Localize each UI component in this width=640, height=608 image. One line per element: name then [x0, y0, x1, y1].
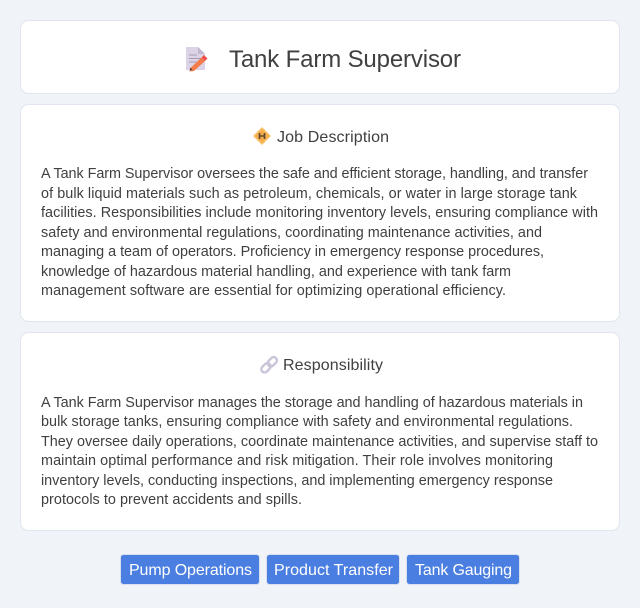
- tag: pump operations: [120, 554, 260, 584]
- text block: job description: knowledge of hazardous material handling, and experience with tank farm: [41, 264, 511, 280]
- text block: job description: of bulk liquid materials such as petroleum, chemicals, or water in large storage tank: [41, 186, 578, 202]
- text block: job description: safety and environmental regulations, coordinating maintenance activities, and: [41, 225, 542, 241]
- text block: responsibility: bulk storage tanks, ensuring compliance with safety and environmental regulations.: [41, 414, 573, 430]
- text block: job description: A Tank Farm Supervisor oversees the safe and efficient storage, handling, and transfer: [41, 166, 588, 182]
- text block: responsibility: [41, 395, 598, 508]
- text block: job description: management software are essential for optimizing operational efficiency.: [41, 283, 506, 299]
- text block: job description: facilities. Responsibilities include monitoring inventory levels, ensuring compliance with: [41, 205, 598, 221]
- panel: responsibility: [20, 332, 620, 530]
- text block: responsibility: A Tank Farm Supervisor manages the storage and handling of hazardous materials in: [41, 395, 583, 411]
- text block: responsibility: protocols to prevent accidents and spills.: [41, 492, 302, 508]
- icon: document with pencil: [186, 47, 208, 72]
- text block: job description: managing a team of operators. Proficiency in emergency response procedures,: [41, 244, 544, 260]
- tags row: [120, 554, 520, 584]
- title: Tank Farm Supervisor: [229, 46, 461, 73]
- text block: responsibility: maintain optimal performance and risk mitigation. Their role involves monitoring: [41, 453, 553, 469]
- tag: tank gauging: Tank Gauging: [415, 562, 512, 579]
- icon: construction diamond: [254, 128, 270, 144]
- heading: responsibility: Responsibility: [283, 357, 383, 374]
- text block: responsibility: They oversee daily operations, coordinate maintenance activities, and supervise staff to: [41, 434, 598, 450]
- tag: pump operations: Pump Operations: [129, 562, 252, 579]
- text block: job description: [41, 166, 598, 299]
- heading: job description: Job Description: [277, 129, 389, 146]
- icon: chain link: [260, 356, 278, 374]
- tag: tank gauging: [406, 554, 520, 584]
- tag: product transfer: [266, 554, 400, 584]
- tag: product transfer: Product Transfer: [274, 562, 394, 579]
- panel: title header: [20, 20, 620, 94]
- text block: responsibility: inventory levels, conducting inspections, and implementing emergency response: [41, 473, 553, 489]
- panel: job description: [20, 104, 620, 322]
